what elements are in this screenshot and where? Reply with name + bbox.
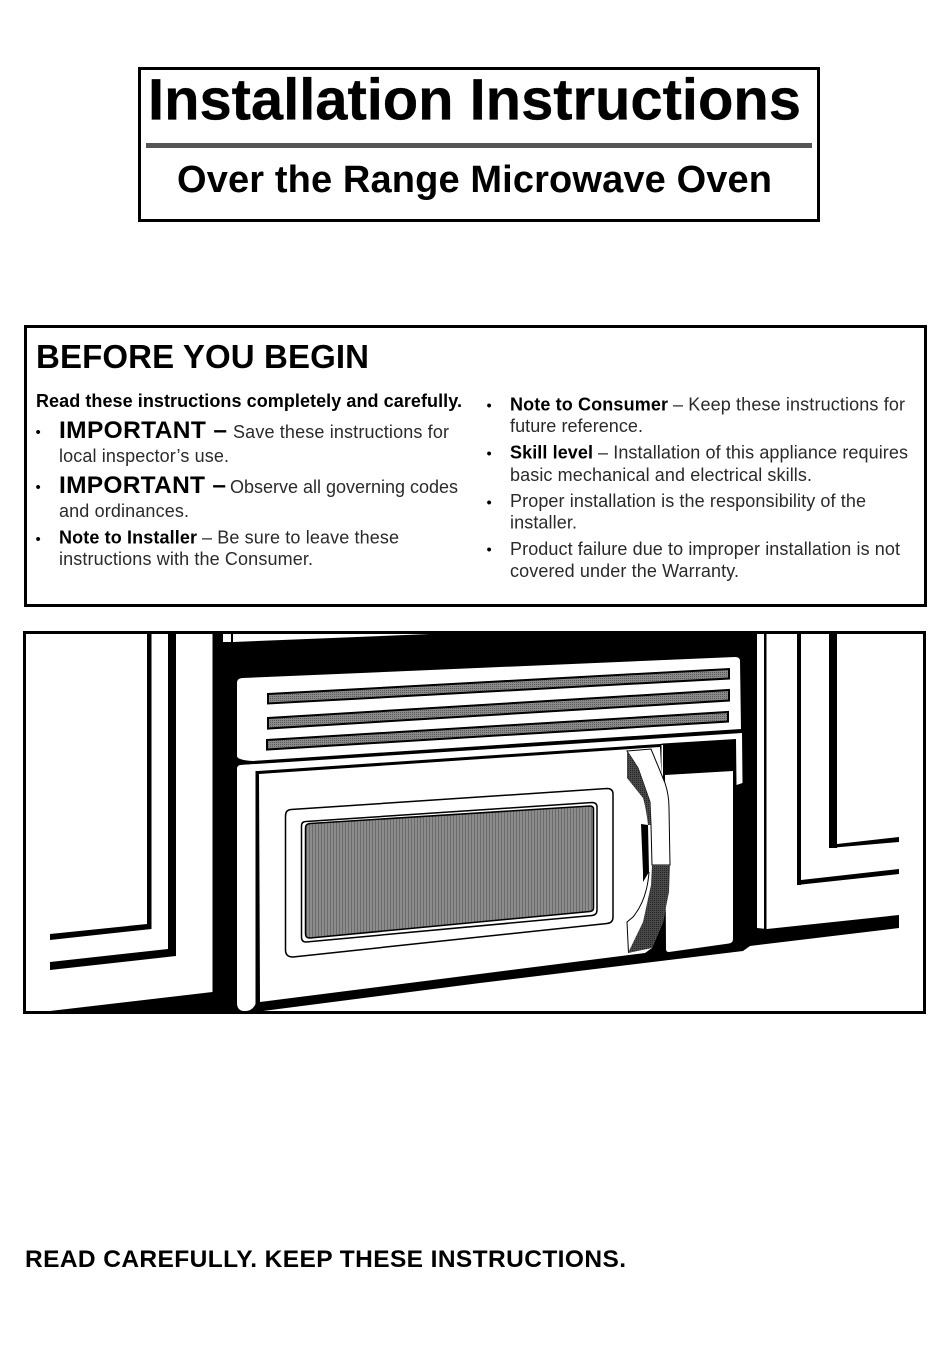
handle upper shade [627, 751, 651, 825]
right column bullets: Skill level [510, 442, 593, 462]
heading: before you begin: BEFORE YOU BEGIN [36, 338, 369, 375]
left column bullets: local inspector’s use. [59, 446, 229, 466]
left column bullets [36, 417, 458, 569]
left column bullets: – Be sure to leave these [202, 528, 399, 548]
right column bullets: Note to Consumer [510, 394, 668, 414]
white gap beside control panel [662, 745, 663, 777]
door face [259, 747, 670, 1002]
right cabinet door lines [764, 634, 899, 929]
left column bullets: Observe all governing codes [230, 477, 458, 497]
right column bullets: Proper installation is the responsibility of the [510, 491, 866, 511]
handle lower shade [628, 865, 670, 953]
left cabinet door lines [50, 634, 176, 970]
left column bullets: instructions with the Consumer. [59, 549, 313, 569]
left side column [237, 764, 256, 1011]
title: Installation Instructions [148, 68, 801, 132]
right column bullets: • [486, 446, 492, 462]
subtitle: Over the Range Microwave Oven [177, 159, 772, 201]
door handle [627, 749, 670, 953]
left column bullets: Save these instructions for [233, 422, 449, 442]
cabinet recess background [50, 634, 899, 1011]
window inner frame [302, 802, 597, 942]
right column bullets [486, 394, 908, 581]
left column bullets: IMPORTANT – [59, 472, 226, 499]
right column bullets: • [486, 494, 492, 512]
top strip and trim [241, 733, 742, 785]
title box [140, 68, 818, 220]
panel border [24, 632, 924, 1012]
panel: before you begin [26, 326, 926, 606]
intro line: Read these instructions completely and carefully. [36, 391, 462, 411]
left column bullets: and ordinances. [59, 501, 189, 521]
right column bullets: Product failure due to improper installation is not [510, 539, 900, 559]
window outer frame [286, 788, 613, 957]
left column bullets: • [36, 531, 41, 548]
left column bullets: IMPORTANT – [59, 417, 227, 444]
right column bullets: future reference. [510, 416, 643, 436]
handle thin curve [627, 872, 649, 953]
handle black recess [641, 824, 649, 882]
vent slats [267, 669, 729, 750]
window glass [306, 806, 594, 938]
control panel black top [663, 740, 736, 776]
top gap sliver [223, 634, 231, 642]
right column bullets: installer. [510, 512, 577, 532]
right column bullets: covered under the Warranty. [510, 561, 739, 581]
control panel [665, 771, 733, 952]
handle upper grip [627, 749, 670, 865]
panel: microwave illustration [24, 632, 924, 1012]
right column bullets: • [486, 542, 492, 558]
left column bullets: • [36, 479, 41, 496]
vent panel [237, 657, 741, 761]
right column bullets: – Keep these instructions for [673, 394, 905, 414]
oven body [237, 733, 742, 1011]
left column bullets: Note to Installer [59, 528, 197, 548]
left column bullets: • [36, 424, 41, 441]
right column bullets: basic mechanical and electrical skills. [510, 465, 812, 485]
footer note: READ CAREFULLY. KEEP THESE INSTRUCTIONS. [25, 1246, 626, 1273]
right column bullets: • [486, 398, 492, 414]
right column bullets: – Installation of this appliance requires [598, 442, 908, 462]
